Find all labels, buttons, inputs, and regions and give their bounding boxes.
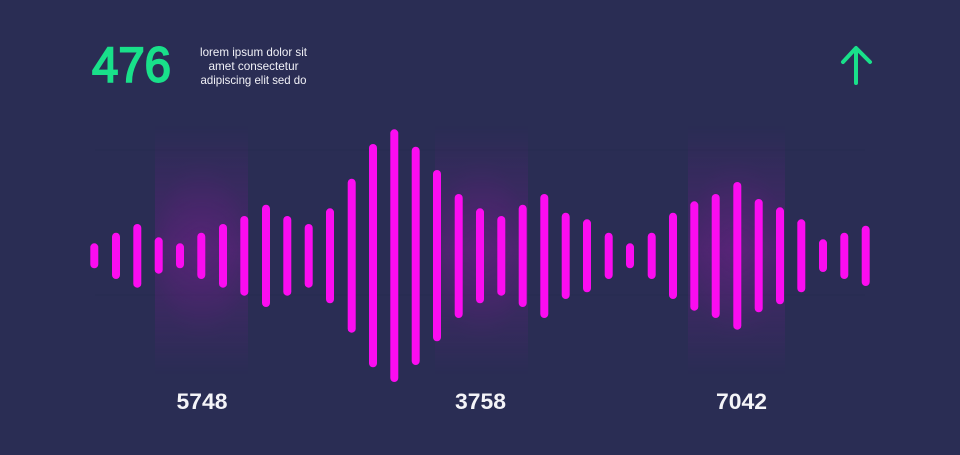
faint grid lines bbox=[95, 150, 865, 295]
value labels: 5748 bbox=[176, 389, 228, 414]
highlight bands bbox=[155, 158, 785, 342]
value labels bbox=[176, 389, 767, 414]
value labels: 3758 bbox=[455, 389, 506, 414]
description text: adipiscing elit sed do bbox=[200, 73, 307, 87]
description text bbox=[200, 45, 308, 87]
band: 5748 bbox=[155, 125, 248, 375]
band: 7042 bbox=[688, 159, 785, 342]
band: 3758 bbox=[435, 125, 528, 375]
description text: amet consectetur bbox=[208, 59, 299, 73]
description text: lorem ipsum dolor sit bbox=[200, 45, 308, 59]
infographic canvas bbox=[90, 46, 872, 409]
icon: up arrow bbox=[843, 48, 870, 83]
value labels: 7042 bbox=[716, 389, 767, 414]
waveform bars bbox=[90, 129, 870, 382]
big number: 476 bbox=[92, 38, 171, 92]
